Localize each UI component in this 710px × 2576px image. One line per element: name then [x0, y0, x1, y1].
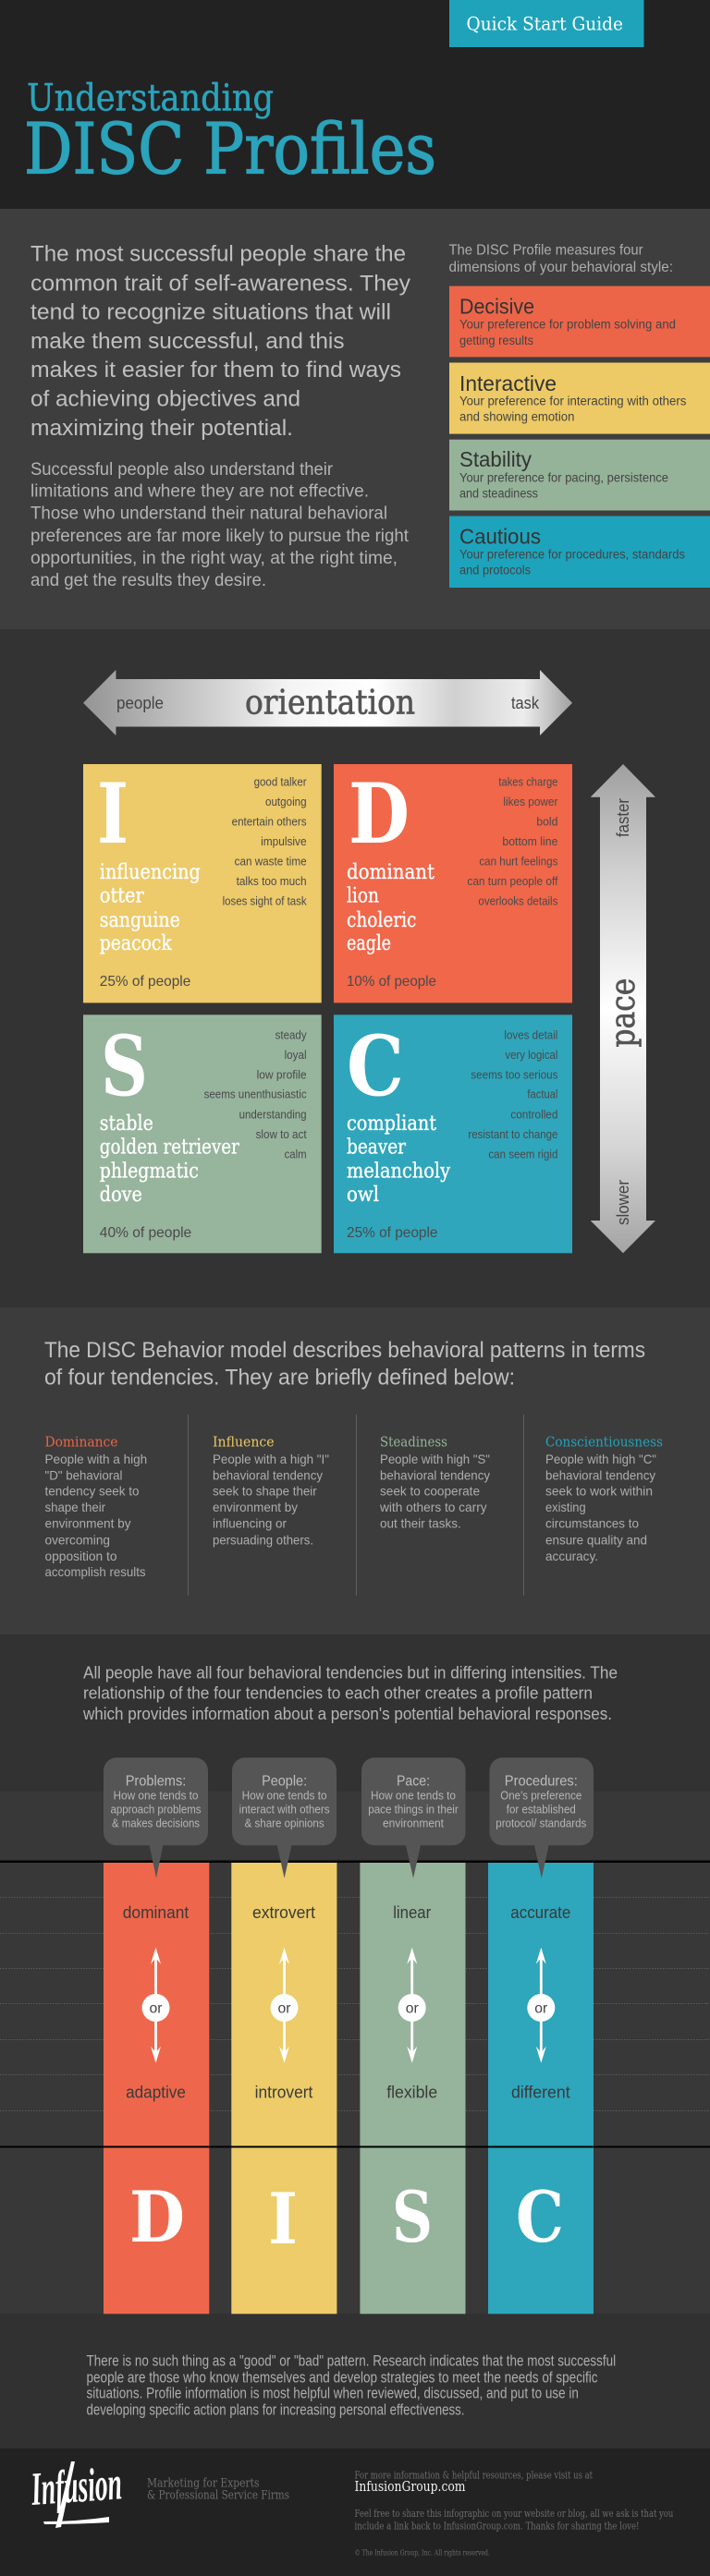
callout: pace: How one tends to: [371, 1788, 456, 1802]
tagline: & Professional Service Firms: [147, 2488, 289, 2502]
text block: differing intensities: which provides information about a person's potential behavioral responses.: [82, 1705, 612, 1723]
panel: I influencing: otter: [100, 885, 144, 908]
panel: D dominant: D: [349, 765, 410, 863]
panel: I influencing: loses sight of task: [223, 893, 307, 907]
panel: I influencing: impulsive: [261, 834, 307, 848]
column: influence: influencing or: [213, 1516, 287, 1531]
heading: DISC behavior model: The DISC Behavior model describes behavioral patterns in terms: [44, 1338, 645, 1363]
column: dominance: [44, 1434, 147, 1579]
column bar: yellow I: [231, 1863, 337, 2314]
callout: people: interact with others: [239, 1803, 330, 1817]
arrow: orientation: task: [511, 694, 540, 712]
panel: S stable: slow to act: [256, 1127, 307, 1141]
tagline: Marketing for Experts: [147, 2477, 259, 2491]
panel: I influencing: I: [97, 765, 129, 863]
text block: no good or bad pattern: situations. Profile information is most helpful when reviewed, discussed, and put to use in: [87, 2385, 579, 2401]
callout: pace: pace things in their: [368, 1803, 459, 1817]
panel: D dominant: eagle: [347, 932, 391, 955]
text block: limitations paragraph: Those who understand their natural behavioral: [31, 504, 387, 524]
panel: C compliant: very logical: [505, 1048, 557, 1062]
arrow: orientation: orientation: [245, 685, 415, 723]
callout: people: & share opinions: [245, 1816, 324, 1829]
column: conscientiousness: behavioral tendency: [545, 1467, 655, 1482]
text block: limitations paragraph: preferences are far more likely to pursue the right: [31, 527, 410, 546]
column bar: red D: D: [129, 2176, 185, 2258]
logo: Infusion: Infusion: [29, 2458, 124, 2516]
panel: decisive: Your preference for problem solving and: [459, 318, 676, 332]
text block: self-awareness intro: The most successful people share the: [31, 242, 406, 267]
panel: C compliant: seems too serious: [471, 1068, 558, 1082]
column: conscientiousness: Conscientiousness: [545, 1434, 663, 1451]
panel: I influencing: can waste time: [235, 854, 307, 869]
logo: Infusion: [29, 2458, 124, 2528]
title: DISC Profiles: [24, 107, 436, 189]
column: conscientiousness: accuracy.: [545, 1549, 598, 1563]
title: Understanding: [27, 77, 274, 119]
panel: S stable: golden retriever: [100, 1136, 239, 1159]
column: steadiness: behavioral tendency: [380, 1467, 490, 1482]
panel: D dominant: bottom line: [502, 834, 557, 848]
text block: no good or bad pattern: developing specific action plans for increasing personal effectiveness.: [87, 2401, 464, 2418]
column: influence: behavioral tendency: [213, 1467, 323, 1482]
text block: self-awareness intro: tend to recognize situations that will: [31, 300, 391, 325]
panel: I influencing: outgoing: [265, 795, 307, 808]
column: dominance: shape their: [44, 1500, 105, 1514]
panel: C compliant: resistant to change: [468, 1127, 557, 1141]
panel: S stable: calm: [285, 1148, 307, 1160]
panel: interactive: and showing emotion: [459, 409, 574, 423]
arrow: orientation: people: [116, 694, 164, 712]
arrow: pace: pace: [605, 978, 643, 1048]
icon: or arrow yellow: or: [277, 2001, 291, 2016]
panel: decisive: getting results: [459, 334, 533, 347]
column: steadiness: People with high "S": [380, 1452, 490, 1466]
callout: pace: [361, 1757, 466, 1878]
column bar: red D: adaptive: [126, 2084, 186, 2102]
panel: C compliant: loves detail: [504, 1027, 557, 1041]
panel: interactive: [449, 362, 710, 434]
panel: I influencing: talks too much: [237, 874, 307, 888]
panel: stability: [449, 440, 710, 510]
callout: problems: Problems:: [126, 1773, 186, 1789]
panel: stability: Stability: [459, 447, 532, 471]
arrow: pace: slower: [614, 1180, 632, 1225]
column bar: blue C: accurate: [510, 1903, 570, 1922]
badge: quick start guide: [449, 0, 643, 47]
panel: D dominant: choleric: [347, 909, 416, 932]
callout: pace: Pace:: [397, 1773, 430, 1789]
panel: I influencing: influencing: [100, 861, 201, 884]
panel: D dominant: likes power: [503, 795, 558, 808]
column bar: green S: [360, 1863, 466, 2314]
column: conscientiousness: [545, 1434, 663, 1563]
footer contact text: For more information & helpful resources, please visit us at: [355, 2468, 593, 2481]
column bar: red D: [104, 1863, 209, 2314]
panel: I influencing: good talker: [254, 774, 307, 788]
panel: S stable: S: [101, 1017, 148, 1115]
arrow: pace: [591, 764, 655, 1253]
panel: C compliant: [334, 1015, 572, 1253]
panel: D dominant: can hurt feelings: [479, 854, 558, 869]
column bar: yellow I: extrovert: [252, 1903, 315, 1922]
column bar: yellow I: introvert: [255, 2084, 312, 2102]
callout: procedures: Procedures:: [505, 1773, 578, 1789]
panel: C compliant: factual: [527, 1088, 557, 1101]
panel: D dominant: dominant: [347, 861, 435, 884]
column bar: blue C: [488, 1863, 594, 2314]
panel: C compliant: compliant: [347, 1112, 436, 1136]
callout: people: How one tends to: [242, 1788, 327, 1802]
column: steadiness: out their tasks.: [380, 1516, 461, 1531]
column bar: green S: S: [392, 2176, 433, 2258]
panel: D dominant: bold: [536, 815, 557, 828]
panel: cautious: and protocols: [459, 563, 531, 577]
column bar: yellow I: I: [268, 2178, 298, 2260]
panel: interactive: Your preference for interacting with others: [459, 394, 687, 407]
column: dominance: opposition to: [44, 1549, 117, 1563]
panel: C compliant: 25% of people: [347, 1225, 438, 1241]
panel: stability: and steadiness: [459, 487, 538, 501]
text block: self-awareness intro: common trait of self-awareness. They: [31, 271, 410, 296]
panel: D dominant: takes charge: [498, 774, 557, 788]
column: conscientiousness: circumstances to: [545, 1516, 639, 1531]
column: influence: People with a high "I": [213, 1452, 329, 1466]
panel: cautious: Cautious: [459, 525, 541, 549]
panel: stability: Your preference for pacing, persistence: [459, 471, 668, 485]
icon: or arrow green: or: [406, 2001, 419, 2016]
panel: S stable: loyal: [285, 1048, 307, 1062]
text block: limitations paragraph: [31, 460, 410, 590]
icon: or arrow red: [142, 1948, 170, 2063]
panel: C compliant: beaver: [347, 1136, 406, 1159]
icon: or arrow yellow: [270, 1948, 298, 2063]
icon: or arrow blue: [527, 1948, 555, 2063]
text block: differing intensities: All people have all four behavioral tendencies but in differing intensities. The: [83, 1664, 618, 1683]
column: dominance: tendency seek to: [44, 1484, 140, 1499]
column: conscientiousness: ensure quality and: [545, 1532, 647, 1547]
panel: S stable: low profile: [257, 1068, 307, 1082]
panel: C compliant: controlled: [510, 1107, 557, 1121]
column bar: green S: linear: [393, 1903, 431, 1922]
panel: S stable: 40% of people: [100, 1225, 191, 1241]
column: influence: environment by: [213, 1500, 298, 1514]
text block: self-awareness intro: of achieving objectives and: [31, 387, 300, 412]
panel: D dominant: overlooks details: [478, 893, 558, 907]
panel: cautious: Your preference for procedures, standards: [459, 547, 685, 562]
icon: or arrow red: or: [150, 2001, 163, 2016]
column: steadiness: Steadiness: [380, 1434, 447, 1451]
icon: or arrow blue: or: [534, 2001, 548, 2016]
panel: S stable: seems unenthusiastic: [204, 1088, 307, 1101]
callout: people: People:: [262, 1773, 307, 1789]
panel: D dominant: can turn people off: [467, 874, 558, 888]
text block: self-awareness intro: make them successful, and this: [31, 329, 344, 354]
text block: four dimensions intro: dimensions of your behavioral style:: [449, 260, 673, 275]
callout: procedures: One's preference: [500, 1788, 581, 1802]
arrow: pace: faster: [614, 798, 632, 837]
column: influence: seek to shape their: [213, 1484, 317, 1499]
column bar: blue C: C: [516, 2176, 564, 2258]
panel: D dominant: [334, 764, 572, 1002]
panel: decisive: Decisive: [459, 294, 534, 318]
callout: procedures: [490, 1757, 594, 1878]
panel: C compliant: C: [347, 1017, 404, 1115]
column: conscientiousness: People with high "C": [545, 1452, 656, 1466]
column: steadiness: with others to carry: [379, 1500, 487, 1514]
text block: differing intensities: relationship of the four tendencies to each other creates a profile pattern: [83, 1684, 593, 1703]
heading: DISC behavior model: of four tendencies. They are briefly defined below:: [44, 1365, 515, 1390]
text block: differing intensities: [82, 1664, 618, 1723]
text block: no good or bad pattern: [87, 2353, 616, 2418]
column: dominance: Dominance: [44, 1434, 118, 1451]
panel: C compliant: melancholy: [347, 1160, 450, 1184]
column: dominance: "D" behavioral: [44, 1467, 122, 1482]
panel: S stable: understanding: [239, 1107, 307, 1121]
title: [24, 77, 436, 189]
callout: procedures: for established: [507, 1803, 576, 1817]
column bar: red D: dominant: [123, 1903, 189, 1922]
callout: problems: & makes decisions: [112, 1816, 200, 1829]
column bar: green S: flexible: [386, 2084, 437, 2102]
panel: I influencing: sanguine: [100, 909, 180, 932]
panel: C compliant: can seem rigid: [488, 1148, 557, 1160]
column: conscientiousness: existing: [545, 1500, 586, 1514]
footer contact text: InfusionGroup.com: [355, 2478, 466, 2495]
callout: problems: How one tends to: [113, 1788, 198, 1802]
panel: C compliant: owl: [347, 1184, 379, 1207]
panel: S stable: [83, 1015, 322, 1253]
text block: limitations paragraph: Successful people also understand their: [31, 460, 334, 480]
panel: D dominant: lion: [347, 885, 379, 908]
column: influence: [213, 1434, 329, 1547]
heading: DISC behavior model: [44, 1338, 645, 1390]
panel: cautious: [449, 516, 710, 588]
column: conscientiousness: seek to work within: [545, 1484, 653, 1499]
callout: people: [232, 1757, 337, 1878]
text block: limitations paragraph: and get the results they desire.: [31, 571, 266, 590]
arrow: orientation: [83, 670, 572, 735]
icon: or arrow green: [398, 1948, 426, 2063]
panel: decisive: [449, 286, 710, 357]
callout: pace: environment: [383, 1816, 444, 1829]
text block: limitations paragraph: limitations and where they are not effective.: [31, 482, 369, 502]
text block: no good or bad pattern: people are those who know themselves and develop strategies to meet the needs of specific: [87, 2370, 597, 2387]
panel: I influencing: 25% of people: [100, 974, 190, 990]
text block: limitations paragraph: opportunities, in the right way, at the right time,: [31, 549, 398, 568]
panel: S stable: steady: [275, 1027, 307, 1041]
footer contact text: [355, 2468, 673, 2558]
callout: procedures: protocol/ standards: [496, 1816, 587, 1829]
column: dominance: environment by: [44, 1516, 131, 1531]
text block: four dimensions intro: The DISC Profile measures four: [449, 242, 643, 258]
text block: self-awareness intro: makes it easier for them to find ways: [31, 358, 401, 383]
badge: quick start guide: Quick Start Guide: [466, 13, 623, 35]
text block: self-awareness intro: maximizing their potential.: [31, 416, 293, 441]
text block: four dimensions intro: [449, 242, 673, 275]
column bar: blue C: different: [511, 2084, 570, 2102]
column: influence: persuading others.: [213, 1532, 313, 1547]
column: dominance: People with a high: [44, 1452, 147, 1466]
panel: interactive: Interactive: [459, 371, 557, 395]
footer contact text: © The Infusion Group, Inc. All rights reserved.: [355, 2548, 490, 2558]
panel: D dominant: 10% of people: [347, 974, 436, 990]
text block: self-awareness intro: [31, 242, 410, 441]
panel: S stable: phlegmatic: [100, 1160, 199, 1184]
column: dominance: accomplish results: [44, 1564, 146, 1579]
callout: problems: [104, 1757, 208, 1878]
callout: problems: approach problems: [111, 1803, 202, 1817]
panel: S stable: stable: [100, 1112, 153, 1136]
column: dominance: overcoming: [44, 1532, 110, 1547]
panel: S stable: dove: [100, 1184, 142, 1207]
panel: I influencing: peacock: [100, 932, 172, 955]
column: steadiness: [379, 1434, 490, 1531]
panel: I influencing: entertain others: [232, 815, 307, 828]
column: steadiness: seek to cooperate: [380, 1484, 480, 1499]
panel: I influencing: [83, 764, 322, 1002]
tagline: [147, 2477, 289, 2502]
column: influence: Influence: [213, 1434, 275, 1451]
